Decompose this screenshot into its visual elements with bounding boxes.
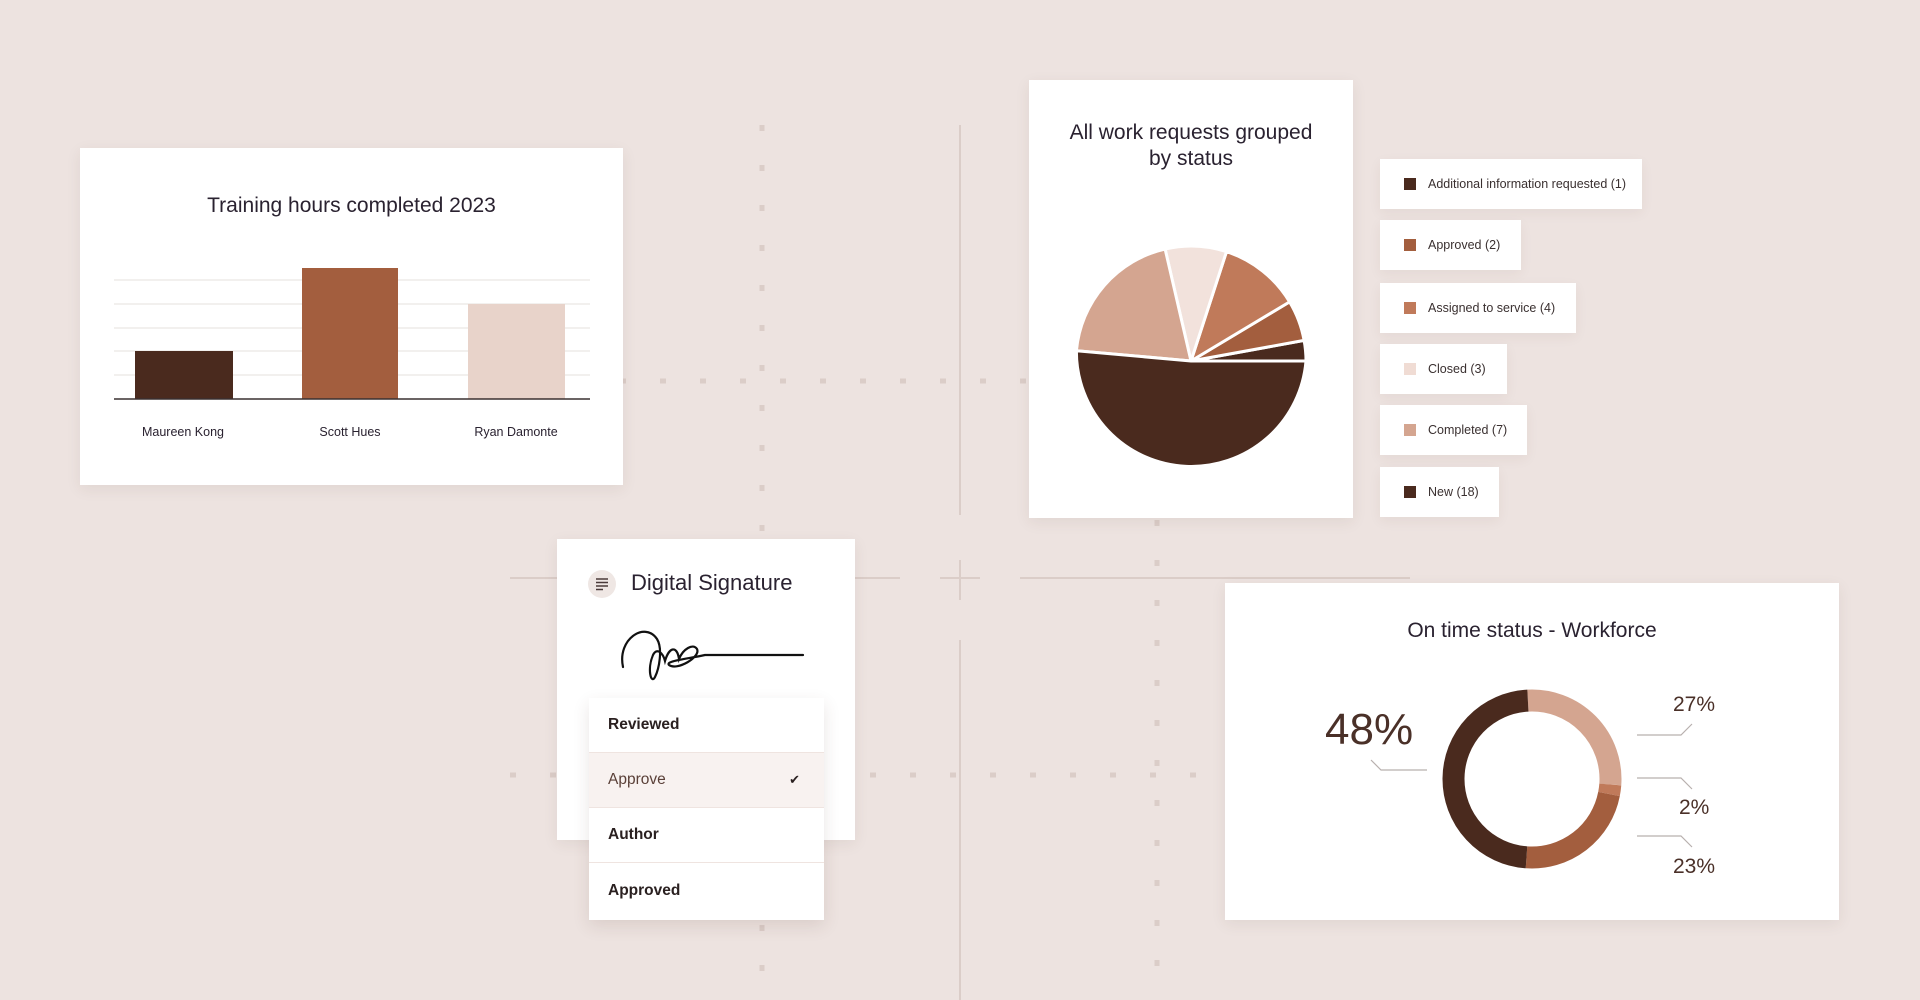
signature bbox=[621, 630, 804, 680]
pie chart bbox=[1078, 248, 1304, 465]
icon: document bbox=[588, 570, 616, 598]
legend: closed bbox=[1380, 344, 1507, 394]
panel: training hours bar chart bbox=[80, 148, 623, 485]
panel: work requests pie bbox=[1029, 80, 1353, 518]
bar chart bbox=[114, 268, 590, 439]
legend: new bbox=[1380, 467, 1499, 517]
heading: work requests: All work requests grouped bbox=[1070, 121, 1312, 144]
panel: on time status donut bbox=[1225, 583, 1839, 920]
donut chart: 23% bbox=[1673, 855, 1715, 878]
heading: training hours: Training hours completed 2023 bbox=[207, 194, 496, 217]
legend: additional info: Additional information requested (1) bbox=[1428, 177, 1626, 191]
dropdown menu bbox=[589, 698, 824, 920]
heading: work requests bbox=[1070, 121, 1312, 170]
option: reviewed: Reviewed bbox=[608, 716, 680, 733]
heading: work requests: by status bbox=[1149, 147, 1233, 170]
option: reviewed bbox=[589, 698, 824, 753]
legend: completed: Completed (7) bbox=[1428, 423, 1507, 437]
option: approve selected: Approve bbox=[608, 771, 666, 788]
panel: digital signature bbox=[557, 539, 855, 840]
legend: closed: Closed (3) bbox=[1428, 362, 1486, 376]
legend: approved bbox=[1380, 220, 1521, 270]
option: approved: Approved bbox=[608, 882, 680, 898]
option: approve selected: ✔ bbox=[789, 772, 800, 787]
legend: completed bbox=[1380, 405, 1527, 455]
bar chart: Ryan Damonte bbox=[474, 425, 558, 439]
donut chart bbox=[1325, 690, 1715, 878]
donut chart: 27% bbox=[1673, 693, 1715, 716]
option: author bbox=[589, 808, 824, 863]
legend: assigned: Assigned to service (4) bbox=[1428, 301, 1555, 315]
legend: additional info bbox=[1380, 159, 1642, 209]
bar chart: Scott Hues bbox=[319, 425, 381, 439]
option: author: Author bbox=[608, 826, 659, 843]
legend: new: New (18) bbox=[1428, 485, 1479, 499]
legend: approved: Approved (2) bbox=[1428, 238, 1500, 252]
donut chart: 48% bbox=[1325, 705, 1413, 754]
heading: digital signature: Digital Signature bbox=[631, 570, 792, 595]
legend: assigned bbox=[1380, 283, 1576, 333]
bar chart: Maureen Kong bbox=[142, 425, 224, 439]
donut chart: 2% bbox=[1679, 796, 1709, 819]
option: approve selected bbox=[589, 753, 824, 808]
heading: on time status: On time status - Workforce bbox=[1407, 619, 1657, 642]
